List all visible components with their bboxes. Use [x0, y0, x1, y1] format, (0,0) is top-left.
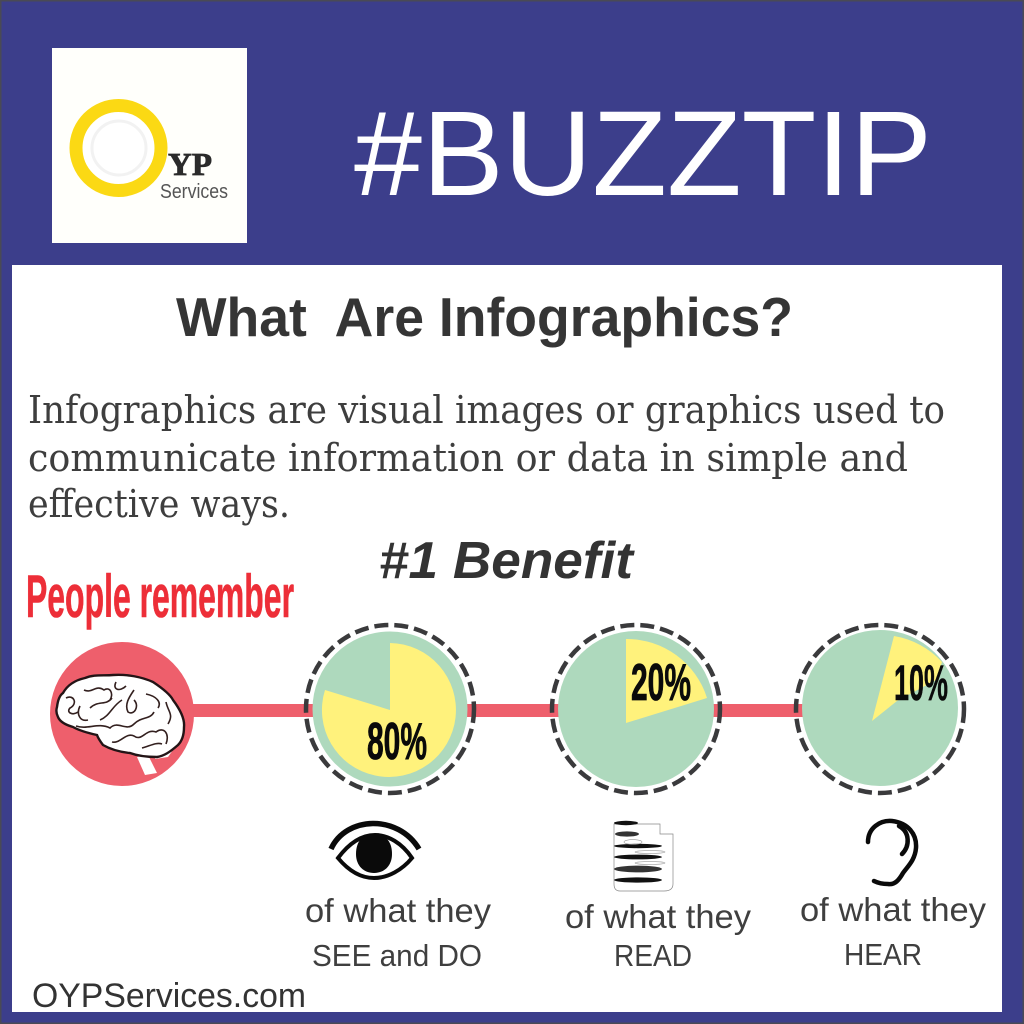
chart: 80% pie: 80% — [367, 713, 427, 771]
content panel — [12, 265, 1002, 1012]
chart: 20% pie: 20% — [631, 654, 691, 712]
chart: 10% pie — [796, 625, 964, 793]
website footer: OYPServices.com — [32, 977, 306, 1015]
logo: Services — [160, 181, 228, 203]
definition text: effective ways. — [28, 482, 290, 526]
chart: 20% pie — [552, 625, 720, 793]
caption: hear: HEAR — [844, 937, 922, 972]
connector line — [185, 704, 805, 717]
caption: read — [565, 898, 752, 973]
chart: 10% pie: 10% — [894, 655, 948, 711]
caption: read: READ — [614, 938, 692, 973]
definition text: communicate information or data in simple and — [28, 436, 908, 480]
definition text: Infographics are visual images or graphics used to — [28, 388, 945, 432]
caption: see and do: SEE and DO — [312, 938, 482, 973]
icon: eye — [331, 823, 419, 878]
icon: brain — [50, 642, 194, 786]
icon: ear — [868, 821, 916, 884]
chart: 80% pie — [306, 625, 474, 793]
caption: hear: of what they — [800, 891, 987, 928]
caption: hear — [800, 891, 987, 972]
logo — [52, 48, 247, 243]
icon: document — [614, 821, 673, 891]
logo: YP — [168, 146, 212, 182]
label: People remember: People remember — [26, 563, 294, 630]
heading: What Are Infographics?: What Are Infographics? — [176, 286, 793, 348]
title: #BUZZTIP: #BUZZTIP — [354, 85, 932, 221]
subheading: #1 Benefit: #1 Benefit — [379, 532, 636, 590]
caption: see and do — [305, 892, 492, 973]
definition text — [28, 388, 945, 526]
caption: see and do: of what they — [305, 892, 492, 929]
caption: read: of what they — [565, 898, 752, 935]
